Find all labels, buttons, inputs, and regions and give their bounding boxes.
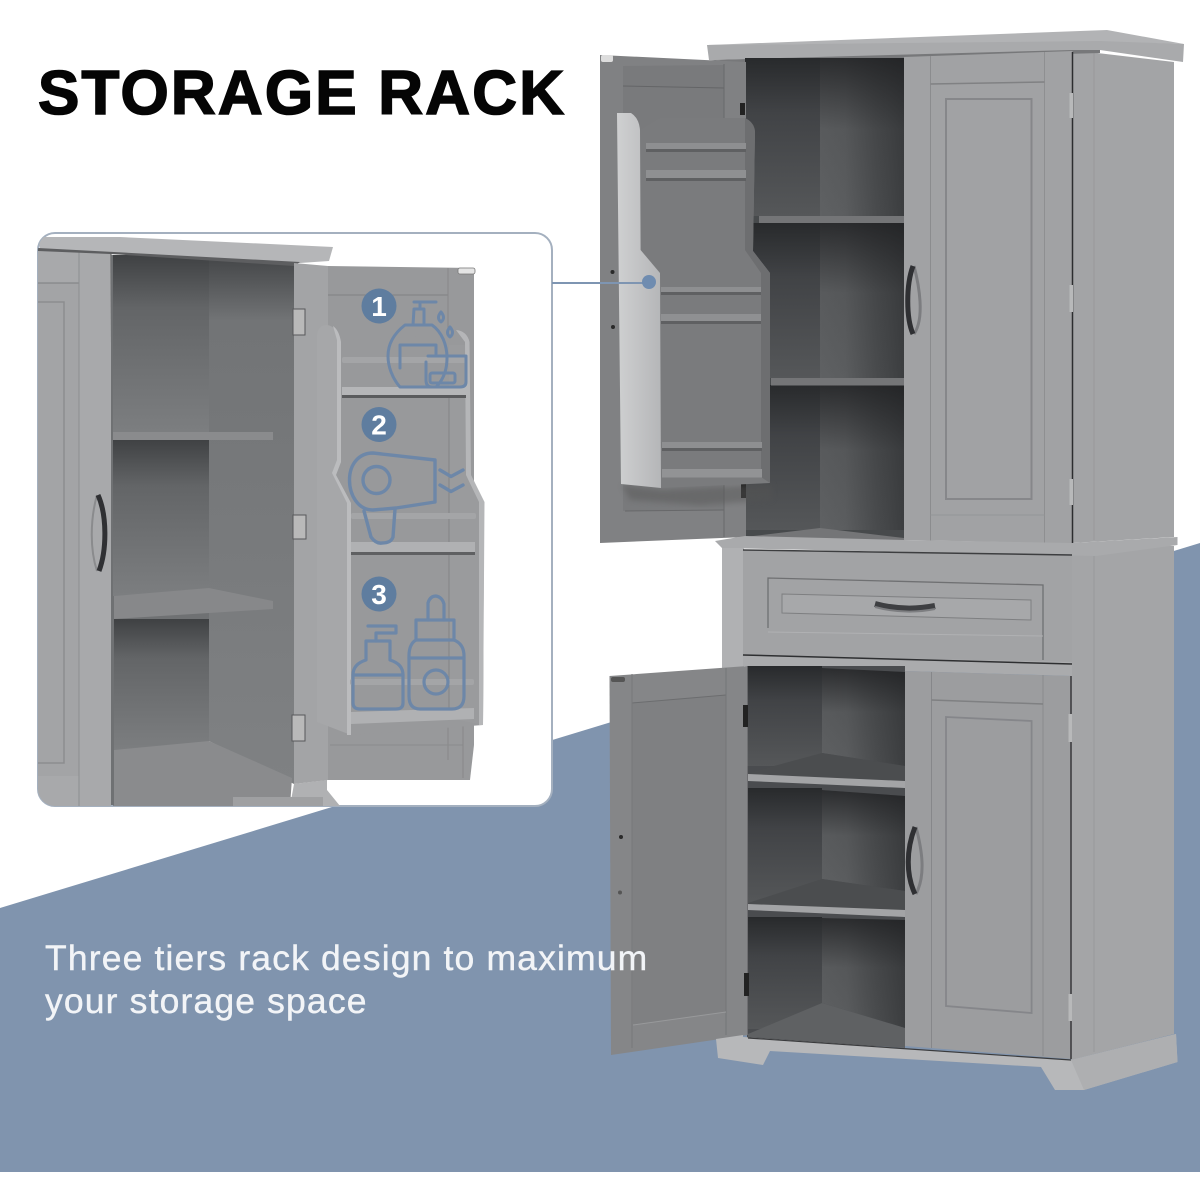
number badge 3: 3 — [371, 579, 387, 610]
lower left door — [610, 666, 749, 1055]
icon: skincare bottles — [353, 596, 464, 709]
title: STORAGE RACK — [38, 59, 566, 128]
number badge 1 — [362, 288, 396, 324]
hinges — [292, 309, 306, 741]
connector line from detail panel to rack — [552, 275, 656, 289]
closed door handle — [92, 495, 105, 571]
number badge 2: 2 — [371, 410, 387, 440]
upper shelves — [759, 216, 904, 223]
number badge 1: 1 — [371, 291, 387, 322]
door rack — [640, 118, 770, 488]
background: blue diagonal band — [0, 543, 1200, 1172]
close-up cabinet photo — [38, 237, 484, 808]
mid ledge — [715, 536, 1178, 556]
right upper door — [904, 51, 1073, 544]
description text: your storage space — [45, 981, 368, 1021]
main cabinet — [600, 30, 1184, 1090]
crown — [707, 30, 1184, 45]
description text: Three tiers rack design to maximum — [45, 938, 648, 978]
lower shelves — [748, 753, 905, 781]
upper interior — [745, 58, 904, 542]
shelf rack back — [448, 337, 484, 728]
upper cabinet side — [1072, 50, 1174, 543]
rails and shelves — [342, 357, 466, 363]
lower interior — [747, 666, 905, 1048]
shelf lower close-up — [114, 588, 273, 619]
cabinet base — [716, 1034, 1178, 1090]
icon: hair dryer — [350, 453, 463, 543]
drawer section — [722, 548, 1072, 676]
panel: rack close-up — [38, 233, 552, 808]
open upper door — [600, 55, 772, 543]
shelf upper close-up — [113, 432, 273, 440]
number badge 3 — [362, 576, 396, 612]
lower right door — [905, 671, 1072, 1059]
icon: soap dispenser and soap dish — [388, 302, 466, 387]
lower cabinet side — [1071, 546, 1174, 1060]
number badge 2 — [362, 407, 396, 442]
